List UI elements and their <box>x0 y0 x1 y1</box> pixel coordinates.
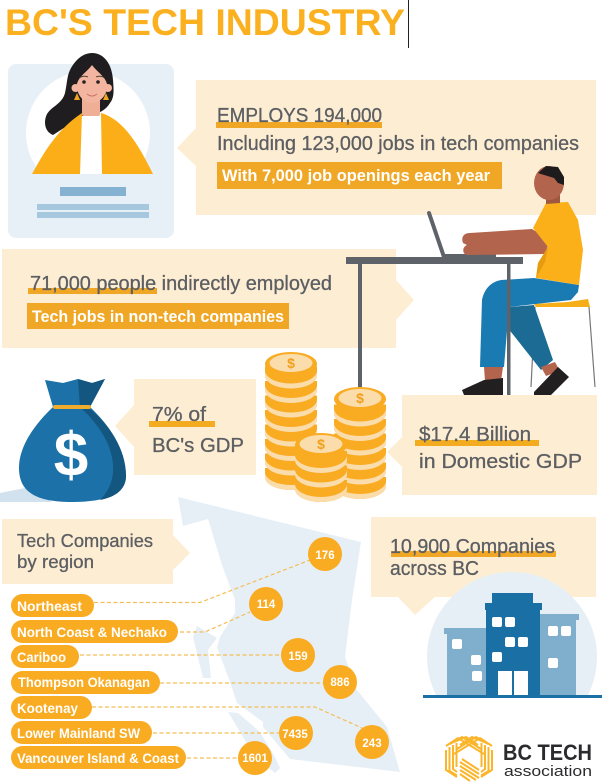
icon: coin stacks <box>265 352 386 502</box>
coin stack left <box>265 352 317 490</box>
panel: 7% of GDP: 7% of <box>152 404 206 426</box>
value: Thompson Okanagan 886: 886 <box>330 677 350 689</box>
value: Kootenay 243: 243 <box>362 738 382 750</box>
icon: money bag <box>0 379 126 502</box>
value: Lower Mainland 7435 <box>279 716 313 750</box>
coin stack front: $ <box>317 436 325 452</box>
value: Kootenay 243 <box>355 725 389 759</box>
region: Vancouver Island & Coast: Vancouver Island & Coast <box>17 750 179 766</box>
region: Cariboo: Cariboo <box>17 649 66 665</box>
panel: employs 194,000: Including 123,000 jobs in tech companies <box>217 133 579 155</box>
icon: money bag: $ <box>54 421 88 490</box>
region: Cariboo <box>11 645 79 668</box>
coin stack left: $ <box>287 355 295 371</box>
coin stack right <box>334 387 386 499</box>
value: Cariboo 159 <box>281 638 315 672</box>
region: North Coast & Nechako <box>11 620 178 643</box>
region leader lines <box>80 560 362 758</box>
panel: 10,900 companies <box>371 517 596 615</box>
panel: 10,900 companies: 10,900 Companies <box>390 536 555 558</box>
region: Thompson Okanagan <box>11 671 160 694</box>
value: North Coast 114: 114 <box>257 599 276 611</box>
region: Vancouver Island & Coast <box>11 746 186 769</box>
panel: employs 194,000 <box>177 80 596 215</box>
icon: logo woven hexagon <box>446 737 492 781</box>
coin stack front <box>295 433 347 502</box>
logo: BC Tech Association: association <box>504 763 592 780</box>
icon: woman portrait <box>32 53 153 174</box>
region: Northeast <box>11 594 94 617</box>
panel: woman profile card <box>8 53 174 238</box>
panel: indirectly employed: Tech jobs in non-tech companies <box>32 307 284 326</box>
panel: 7% of GDP <box>115 379 256 475</box>
value: Northeast 176: 176 <box>315 550 335 562</box>
panel: tech companies by region heading: Tech Companies <box>17 531 153 551</box>
panel: employs 194,000: With 7,000 job openings each year <box>222 166 490 185</box>
region: Lower Mainland SW: Lower Mainland SW <box>17 725 141 741</box>
panel: tech companies by region heading: by region <box>17 552 94 572</box>
panel: domestic GDP: in Domestic GDP <box>419 451 582 473</box>
panel: employs 194,000: EMPLOYS 194,000 <box>217 105 382 127</box>
panel: domestic GDP <box>387 395 597 495</box>
region: Northeast: Northeast <box>17 598 82 614</box>
panel: tech companies by region heading <box>2 519 190 584</box>
value: Cariboo 159: 159 <box>288 651 308 663</box>
panel: indirectly employed <box>2 249 414 348</box>
icon: man at desk <box>346 166 595 396</box>
icon: office buildings <box>423 572 602 698</box>
value: Northeast 176 <box>308 537 342 571</box>
panel: 10,900 companies: across BC <box>390 558 479 580</box>
region: North Coast & Nechako: North Coast & Nechako <box>17 624 167 640</box>
region: Thompson Okanagan: Thompson Okanagan <box>18 674 150 690</box>
region: Kootenay <box>11 696 92 719</box>
region: Lower Mainland SW <box>11 721 152 744</box>
logo: BC Tech Association <box>446 737 592 781</box>
value: North Coast 114 <box>249 587 283 621</box>
title: BC'S TECH INDUSTRY <box>5 2 405 43</box>
value: Thompson Okanagan 886 <box>323 665 357 699</box>
map: British Columbia <box>178 497 400 773</box>
value: Lower Mainland 7435: 7435 <box>282 729 308 741</box>
panel: domestic GDP: $17.4 Billion <box>419 424 531 446</box>
logo: BC Tech Association: BC TECH <box>503 740 592 765</box>
value: Vancouver Island 1601: 1601 <box>242 753 268 765</box>
panel: 7% of GDP: BC's GDP <box>152 435 244 457</box>
panel: indirectly employed: 71,000 people indirectly employed <box>30 273 332 295</box>
value: Vancouver Island 1601 <box>238 741 272 775</box>
coin stack right: $ <box>356 390 364 406</box>
region: Kootenay: Kootenay <box>17 700 78 716</box>
